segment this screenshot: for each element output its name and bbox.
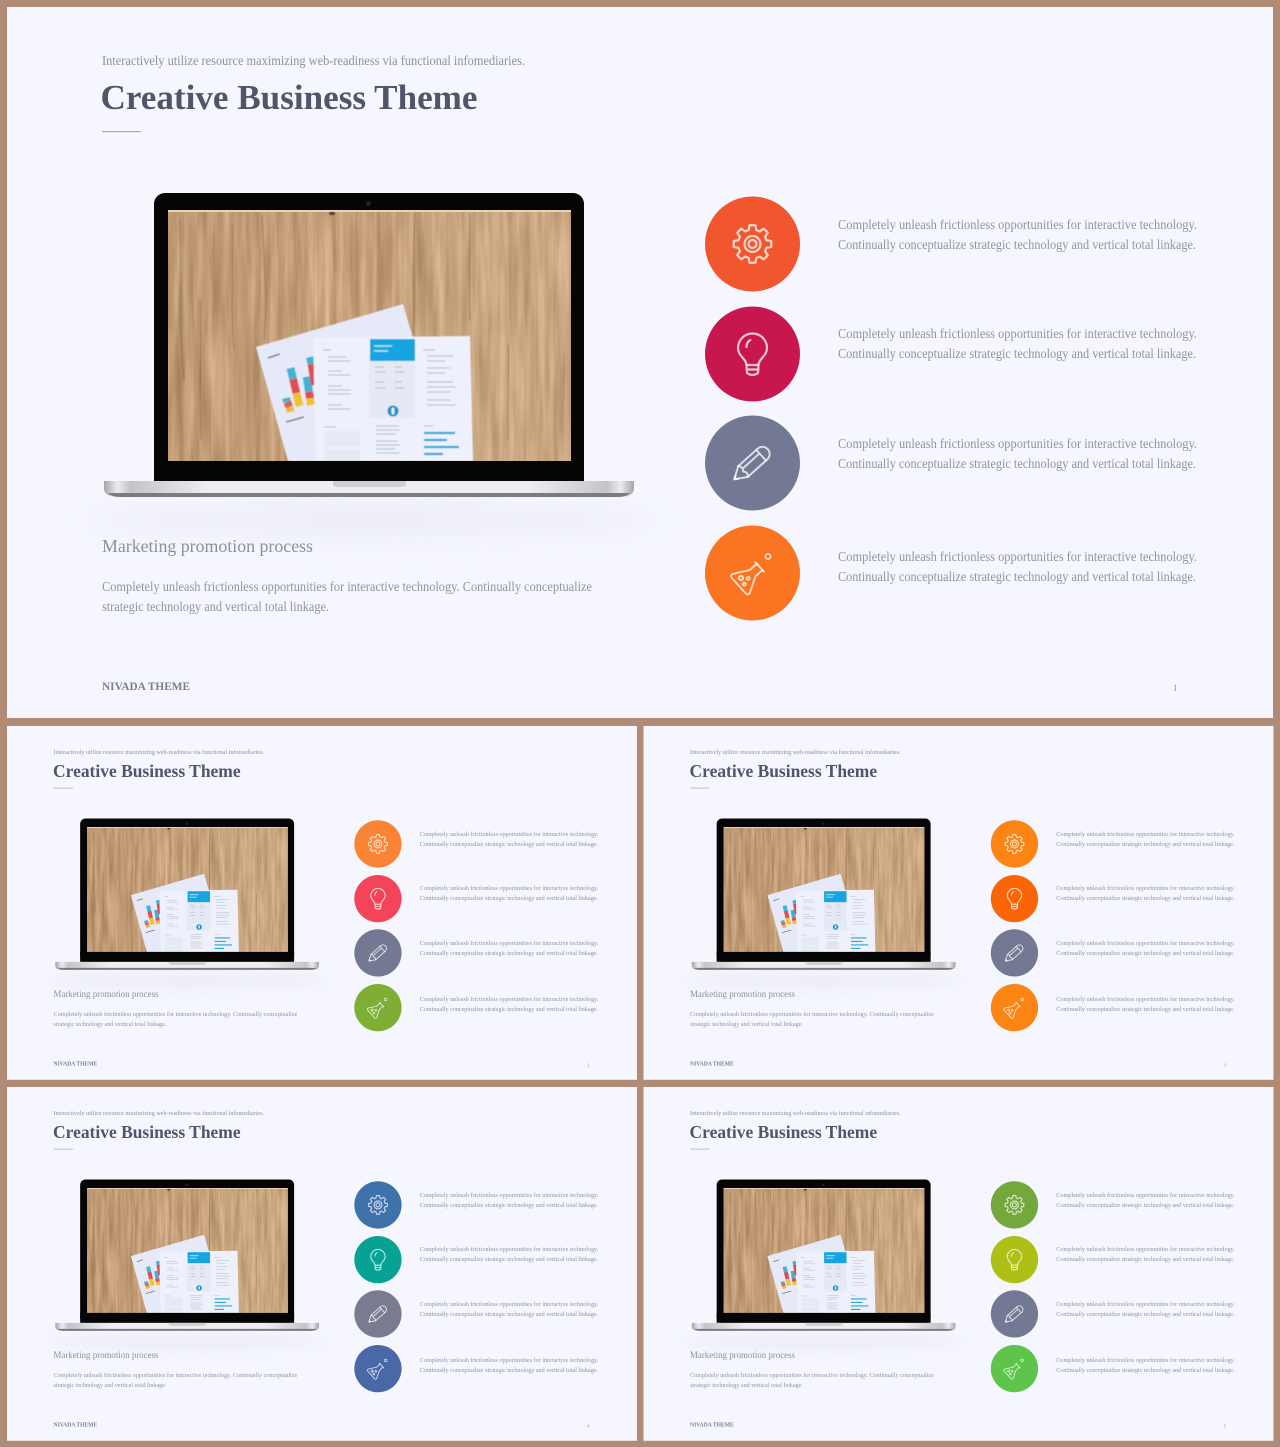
feature row 4 bbox=[991, 1345, 1235, 1392]
feature row 1: Continually conceptualize strategic technology and vertical total linkage. bbox=[1056, 841, 1235, 848]
description bbox=[690, 1011, 934, 1028]
subheading: Marketing promotion process bbox=[690, 989, 796, 999]
feature row 3: Continually conceptualize strategic technology and vertical total linkage. bbox=[420, 1311, 598, 1318]
page number: 2 bbox=[587, 1062, 589, 1067]
description: strategic technology and vertical total linkage. bbox=[690, 1021, 803, 1028]
feature row 3: Completely unleash frictionless opportunities for interactive technology. bbox=[420, 940, 599, 947]
feature row 1 bbox=[991, 820, 1235, 868]
laptop mockup bbox=[682, 1180, 966, 1348]
laptop mockup bbox=[46, 1180, 329, 1348]
feature row 4 bbox=[991, 984, 1235, 1031]
feature row 1: Completely unleash frictionless opportunities for interactive technology. bbox=[420, 1192, 599, 1199]
feature row 4: Completely unleash frictionless opportunities for interactive technology. bbox=[1056, 996, 1235, 1003]
footer brand: NIVADA THEME bbox=[54, 1061, 97, 1067]
feature row 1: Continually conceptualize strategic technology and vertical total linkage. bbox=[420, 1202, 598, 1209]
feature row 4 bbox=[705, 526, 1197, 620]
feature row 2: Completely unleash frictionless opportunities for interactive technology. bbox=[420, 885, 599, 892]
feature row 1 bbox=[354, 820, 599, 868]
feature row 3: Completely unleash frictionless opportunities for interactive technology. bbox=[838, 436, 1197, 451]
page number: 4 bbox=[587, 1423, 590, 1428]
description: Completely unleash frictionless opportunities for interactive technology. Continually conceptualize bbox=[54, 1372, 297, 1379]
feature row 1: Completely unleash frictionless opportunities for interactive technology. bbox=[838, 217, 1197, 232]
feature row 2 bbox=[991, 875, 1235, 922]
title: Creative Business Theme bbox=[690, 1122, 877, 1142]
description bbox=[102, 579, 592, 614]
description: strategic technology and vertical total linkage. bbox=[54, 1382, 167, 1389]
description bbox=[54, 1372, 297, 1389]
feature row 2 bbox=[705, 306, 1197, 402]
feature row 4 bbox=[354, 984, 599, 1031]
feature row 3: Completely unleash frictionless opportunities for interactive technology. bbox=[1056, 940, 1235, 947]
feature row 3: Completely unleash frictionless opportunities for interactive technology. bbox=[420, 1301, 599, 1308]
description: strategic technology and vertical total linkage. bbox=[102, 599, 329, 614]
footer brand: NIVADA THEME bbox=[690, 1061, 734, 1067]
feature row 1: Continually conceptualize strategic technology and vertical total linkage. bbox=[1056, 1202, 1235, 1209]
feature row 1: Continually conceptualize strategic technology and vertical total linkage. bbox=[838, 237, 1196, 252]
feature row 3 bbox=[991, 929, 1235, 977]
feature row 3: Continually conceptualize strategic technology and vertical total linkage. bbox=[1056, 950, 1235, 957]
feature row 4: Continually conceptualize strategic technology and vertical total linkage. bbox=[838, 569, 1196, 584]
feature row 2 bbox=[354, 875, 599, 922]
description bbox=[54, 1011, 297, 1028]
feature row 1 bbox=[991, 1181, 1235, 1229]
description: Completely unleash frictionless opportunities for interactive technology. Continually conceptualize bbox=[54, 1011, 297, 1018]
subtitle: Interactively utilize resource maximizing web-readiness via functional infomediaries. bbox=[690, 1110, 901, 1117]
feature row 2: Continually conceptualize strategic technology and vertical total linkage. bbox=[420, 1256, 598, 1263]
title: Creative Business Theme bbox=[53, 1122, 241, 1142]
feature row 4: Continually conceptualize strategic technology and vertical total linkage. bbox=[420, 1006, 598, 1013]
feature row 1 bbox=[705, 196, 1197, 292]
feature row 3: Continually conceptualize strategic technology and vertical total linkage. bbox=[420, 950, 598, 957]
subheading: Marketing promotion process bbox=[54, 989, 159, 999]
feature row 4: Completely unleash frictionless opportunities for interactive technology. bbox=[838, 549, 1197, 564]
feature row 4: Continually conceptualize strategic technology and vertical total linkage. bbox=[1056, 1006, 1235, 1013]
subtitle: Interactively utilize resource maximizing web-readiness via functional infomediaries. bbox=[690, 749, 901, 756]
panel: slide variant 3 (orange tones) bbox=[644, 726, 1273, 1080]
feature row 3: Completely unleash frictionless opportunities for interactive technology. bbox=[1056, 1301, 1235, 1308]
footer brand: NIVADA THEME bbox=[54, 1422, 97, 1428]
subheading: Marketing promotion process bbox=[54, 1350, 159, 1360]
footer brand: NIVADA THEME bbox=[690, 1422, 734, 1428]
subtitle: Interactively utilize resource maximizing web-readiness via functional infomediaries. bbox=[54, 1110, 264, 1117]
panel: slide variant 4 (blue, teal) bbox=[7, 1087, 637, 1441]
feature row 3: Continually conceptualize strategic technology and vertical total linkage. bbox=[838, 456, 1196, 471]
feature row 1: Completely unleash frictionless opportunities for interactive technology. bbox=[420, 831, 599, 838]
feature row 2: Completely unleash frictionless opportunities for interactive technology. bbox=[1056, 1246, 1235, 1253]
page number: 5 bbox=[1224, 1423, 1227, 1428]
feature row 4 bbox=[354, 1345, 599, 1392]
feature row 2: Completely unleash frictionless opportunities for interactive technology. bbox=[1056, 885, 1235, 892]
feature row 1 bbox=[354, 1181, 599, 1229]
feature row 2: Continually conceptualize strategic technology and vertical total linkage. bbox=[1056, 1256, 1235, 1263]
page number: 1 bbox=[1173, 683, 1178, 693]
title: Creative Business Theme bbox=[53, 761, 241, 781]
subheading: Marketing promotion process bbox=[102, 536, 313, 556]
description: strategic technology and vertical total linkage. bbox=[54, 1021, 167, 1028]
feature row 2: Continually conceptualize strategic technology and vertical total linkage. bbox=[1056, 895, 1235, 902]
description bbox=[690, 1372, 934, 1389]
feature row 3 bbox=[705, 416, 1197, 510]
panel: main slide bbox=[7, 7, 1273, 718]
description: Completely unleash frictionless opportunities for interactive technology. Continually conceptualize bbox=[690, 1011, 934, 1018]
feature row 2: Continually conceptualize strategic technology and vertical total linkage. bbox=[838, 346, 1196, 361]
feature row 2: Completely unleash frictionless opportunities for interactive technology. bbox=[420, 1246, 599, 1253]
feature row 3 bbox=[354, 1290, 599, 1338]
footer brand: NIVADA THEME bbox=[102, 679, 190, 693]
feature row 3: Continually conceptualize strategic technology and vertical total linkage. bbox=[1056, 1311, 1235, 1318]
feature row 2 bbox=[991, 1236, 1235, 1283]
description: strategic technology and vertical total linkage. bbox=[690, 1382, 803, 1389]
laptop mockup bbox=[85, 193, 655, 532]
subheading: Marketing promotion process bbox=[690, 1350, 796, 1360]
description: Completely unleash frictionless opportunities for interactive technology. Continually conceptualize bbox=[690, 1372, 934, 1379]
feature row 4: Continually conceptualize strategic technology and vertical total linkage. bbox=[420, 1367, 598, 1374]
feature row 3 bbox=[991, 1290, 1235, 1338]
laptop mockup bbox=[682, 819, 966, 987]
laptop mockup bbox=[46, 819, 329, 987]
feature row 4: Completely unleash frictionless opportunities for interactive technology. bbox=[1056, 1357, 1235, 1364]
feature row 1: Completely unleash frictionless opportunities for interactive technology. bbox=[1056, 831, 1235, 838]
page number: 3 bbox=[1224, 1062, 1227, 1067]
title: Creative Business Theme bbox=[690, 761, 877, 781]
panel: slide variant 5 (greens) bbox=[644, 1087, 1273, 1441]
subtitle: Interactively utilize resource maximizing web-readiness via functional infomediaries. bbox=[102, 53, 525, 68]
feature row 4: Continually conceptualize strategic technology and vertical total linkage. bbox=[1056, 1367, 1235, 1374]
feature row 4: Completely unleash frictionless opportunities for interactive technology. bbox=[420, 1357, 599, 1364]
feature row 1: Continually conceptualize strategic technology and vertical total linkage. bbox=[420, 841, 598, 848]
feature row 2 bbox=[354, 1236, 599, 1283]
subtitle: Interactively utilize resource maximizing web-readiness via functional infomediaries. bbox=[54, 749, 264, 756]
feature row 2: Continually conceptualize strategic technology and vertical total linkage. bbox=[420, 895, 598, 902]
feature row 4: Completely unleash frictionless opportunities for interactive technology. bbox=[420, 996, 599, 1003]
feature row 1: Completely unleash frictionless opportunities for interactive technology. bbox=[1056, 1192, 1235, 1199]
feature row 2: Completely unleash frictionless opportunities for interactive technology. bbox=[838, 326, 1197, 341]
title: Creative Business Theme bbox=[100, 78, 477, 117]
feature row 3 bbox=[354, 929, 599, 977]
panel: slide variant 2 (orange, red, green) bbox=[7, 726, 637, 1080]
description: Completely unleash frictionless opportunities for interactive technology. Continually conceptualize bbox=[102, 579, 592, 594]
